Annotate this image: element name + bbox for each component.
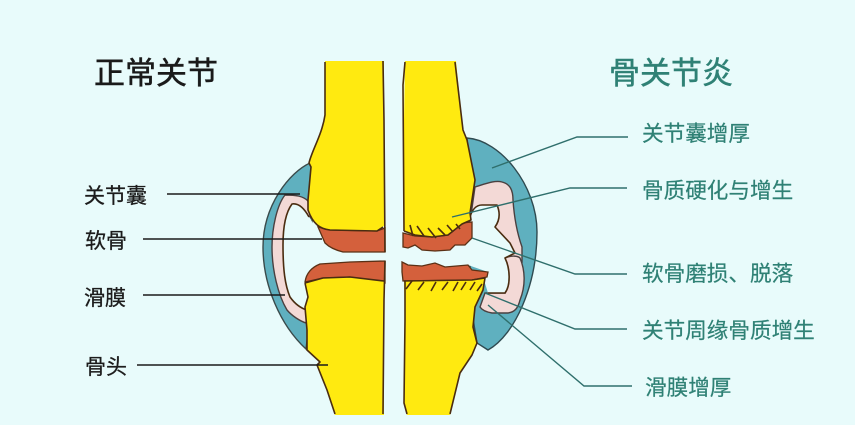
left label: synovium: 滑膜 (84, 287, 126, 310)
upper synovium: thickened (471, 181, 522, 262)
upper bone: normal (308, 61, 384, 231)
lower cartilage: worn (402, 262, 488, 281)
bone spurs: upper (410, 224, 460, 238)
right label: bone sclerosis and hyperplasia (452, 178, 793, 217)
title: osteoarthritis: 骨关节炎 (609, 56, 733, 91)
normal joint illustration (263, 61, 385, 415)
left label: joint capsule: 关节囊 (84, 185, 147, 208)
bone spurs: lower (406, 281, 482, 291)
joint capsule: normal (263, 163, 312, 349)
title: normal joint: 正常关节 (94, 56, 218, 91)
lower synovium: thickened (480, 256, 524, 313)
synovium: normal (272, 195, 310, 323)
joint space: narrowed (404, 205, 515, 293)
left label: cartilage: 软骨 (85, 230, 127, 253)
lower bone: osteophytes (404, 278, 485, 415)
osteoarthritis joint illustration (402, 61, 537, 415)
upper cartilage: normal (318, 227, 385, 252)
upper cartilage: worn (403, 222, 472, 251)
lower bone: normal (305, 277, 384, 415)
right label: cartilage wear and shedding (472, 238, 794, 286)
lower cartilage: normal (305, 261, 385, 283)
left label: bone: 骨头 (85, 356, 127, 379)
joint capsule: thickened (467, 138, 537, 350)
upper bone: sclerosis (404, 61, 475, 237)
right label: peripheral bone hyperplasia (485, 293, 815, 343)
right label: cartilage wear and shedding: 软骨磨损、脱落 (642, 261, 794, 286)
right label: synovium thickening (488, 305, 731, 400)
right label: peripheral bone hyperplasia: 关节周缘骨质增生 (642, 318, 815, 343)
right label: capsule thickening: 关节囊增厚 (642, 121, 750, 146)
right label: bone sclerosis and hyperplasia: 骨质硬化与增生 (642, 178, 793, 203)
right label: capsule thickening (492, 121, 750, 168)
joint space: normal (283, 204, 385, 310)
right label: synovium thickening: 滑膜增厚 (645, 375, 731, 400)
